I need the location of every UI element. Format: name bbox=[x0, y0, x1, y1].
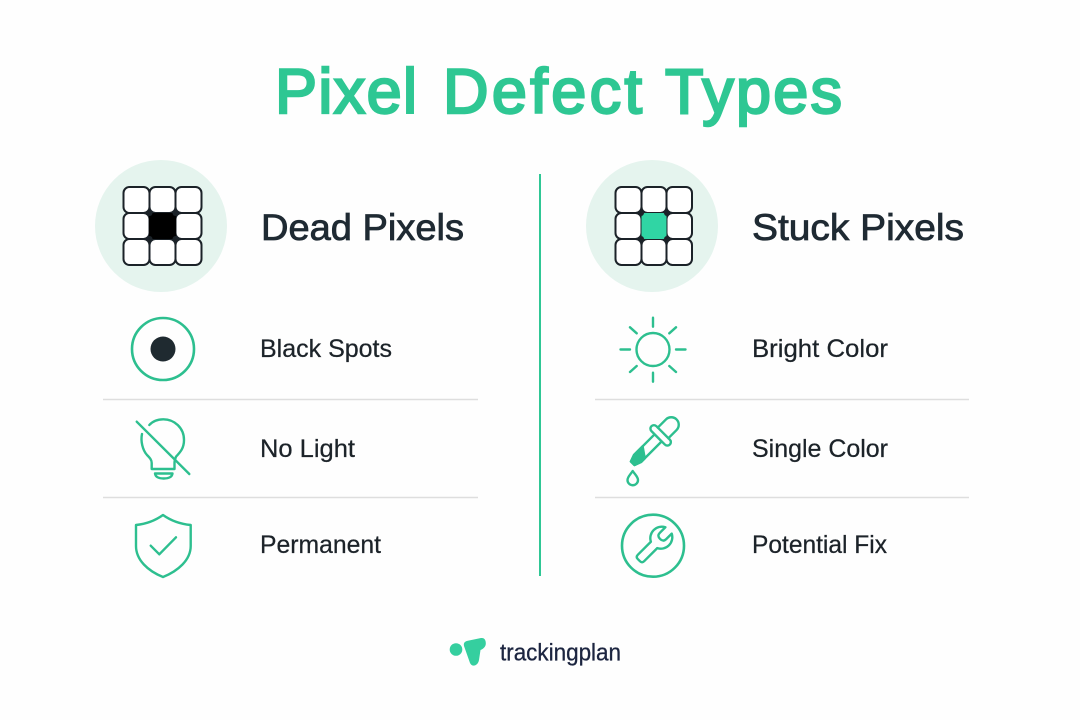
icon: crossed light bulb bbox=[137, 419, 189, 478]
heading: dead pixels: Dead Pixels bbox=[261, 207, 464, 248]
label: potential fix: Potential Fix bbox=[752, 531, 887, 559]
center divider bbox=[539, 174, 541, 576]
icon: eyedropper bbox=[624, 410, 686, 485]
label: bright color: Bright Color bbox=[752, 335, 888, 363]
title: Pixel bbox=[275, 57, 417, 127]
icon: stuck pixel grid bbox=[586, 160, 718, 292]
label: permanent: Permanent bbox=[260, 531, 381, 559]
title bbox=[275, 57, 842, 127]
panel: dead pixels bbox=[95, 160, 478, 577]
title: Types bbox=[665, 57, 842, 127]
icon: shield with check bbox=[136, 515, 191, 577]
panel: stuck pixels bbox=[586, 160, 969, 577]
label: single color: Single Color bbox=[752, 435, 888, 463]
title: Defect bbox=[443, 57, 642, 127]
wordmark: trackingplan bbox=[500, 640, 621, 666]
icon: logo mark bbox=[450, 638, 486, 666]
logo: trackingplan bbox=[450, 638, 621, 666]
heading: stuck pixels: Stuck Pixels bbox=[752, 207, 964, 248]
icon: black spot bbox=[132, 318, 194, 380]
icon: droplet bbox=[628, 471, 638, 485]
label: black spots: Black Spots bbox=[260, 335, 392, 363]
icon: sun bbox=[620, 318, 686, 382]
icon: wrench bbox=[622, 515, 684, 577]
icon: dead pixel grid bbox=[95, 160, 227, 292]
label: no light: No Light bbox=[260, 435, 355, 463]
